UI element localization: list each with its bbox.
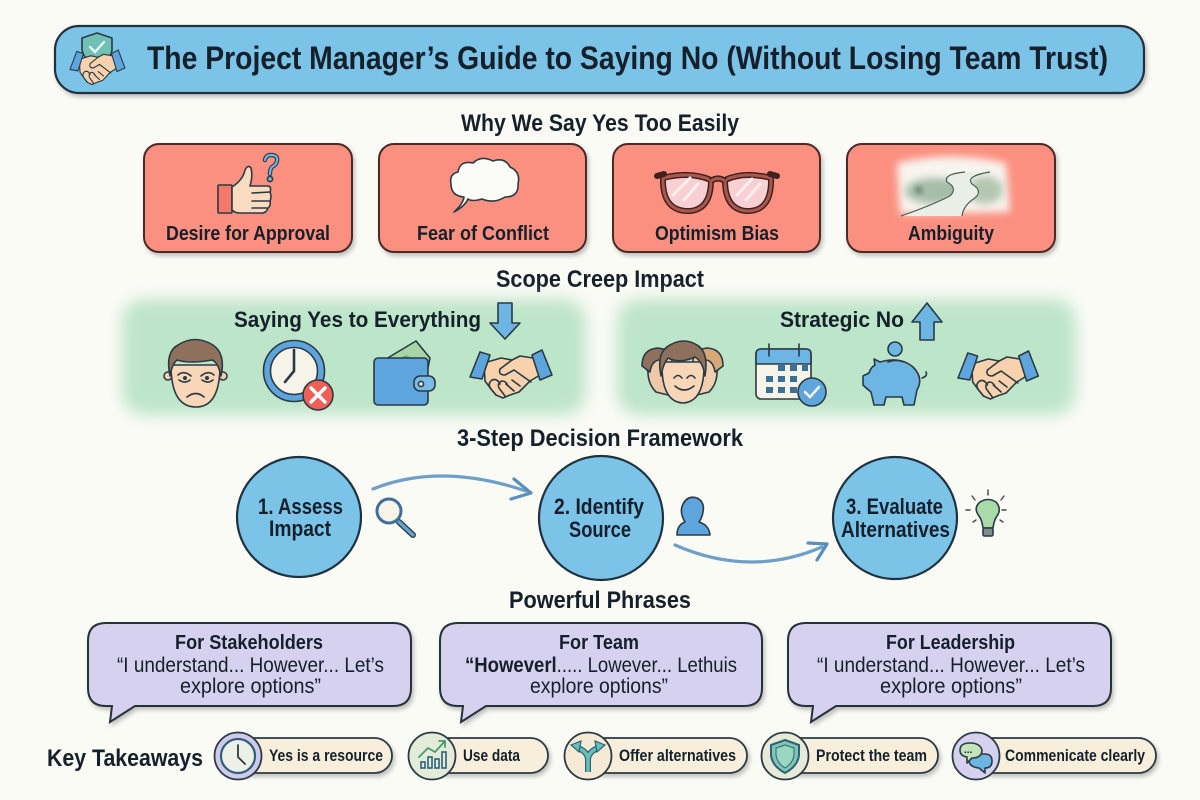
arrow: step 1 to 2 bbox=[373, 476, 531, 499]
icon: thumbs up with question mark bbox=[218, 155, 277, 213]
icon: speech cloud bbox=[451, 158, 519, 212]
label: Desire for Approval bbox=[166, 223, 330, 245]
title text: The Project Manager’s Guide to Saying No (Without Losing Team Trust) bbox=[147, 40, 1108, 76]
takeaway: offer alternatives: Offer alternatives bbox=[619, 746, 736, 765]
bubble: for leadership: For Leadership bbox=[886, 632, 1015, 654]
bubble: for leadership: “I understand... However... Let’s bbox=[817, 654, 1085, 677]
heading: why we say yes: Why We Say Yes Too Easily bbox=[461, 110, 740, 137]
title banner bbox=[55, 26, 1144, 93]
icon: clock with red cross bbox=[264, 340, 333, 410]
step 1 bbox=[237, 457, 361, 577]
card: desire for approval bbox=[144, 144, 352, 252]
arrow: step 2 to 3 bbox=[675, 543, 827, 562]
icon: arrow down bbox=[490, 303, 520, 339]
panel: reasons for saying yes bbox=[144, 144, 1055, 252]
icon: handshake bbox=[958, 351, 1038, 399]
card: fear of conflict bbox=[379, 144, 586, 252]
card: optimism bias bbox=[613, 144, 820, 252]
takeaway: protect the team bbox=[762, 732, 938, 780]
step 2: 2. Identify bbox=[554, 494, 645, 519]
takeaway: offer alternatives bbox=[564, 732, 747, 780]
bubble: for team: explore options” bbox=[530, 675, 668, 698]
bubble: for team: For Team bbox=[559, 632, 639, 654]
step 3 bbox=[833, 457, 957, 579]
icon: person bbox=[677, 497, 710, 535]
panel: phrase speech bubbles bbox=[88, 623, 1111, 722]
takeaway: communicate clearly: ... bbox=[964, 745, 973, 756]
panel: saying yes to everything bbox=[122, 299, 586, 415]
bubble: for stakeholders: “I understand... However... Let’s bbox=[117, 654, 384, 677]
label: Fear of Conflict bbox=[417, 223, 549, 245]
icon: calendar with check bbox=[756, 344, 826, 406]
step 2 bbox=[539, 456, 663, 580]
icon: wallet with cash bbox=[374, 341, 435, 405]
panel heading: Saying Yes to Everything bbox=[234, 307, 481, 332]
panel: strategic no bbox=[617, 299, 1076, 415]
bubble: for team: “Howeverl..... Lowever... Lethuis bbox=[465, 654, 737, 677]
heading: scope creep impact: Scope Creep Impact bbox=[496, 266, 704, 293]
icon: shield and handshake bbox=[70, 33, 125, 85]
heading: powerful phrases: Powerful Phrases bbox=[509, 587, 691, 614]
label: Ambiguity bbox=[908, 223, 995, 245]
icon: foggy road bbox=[897, 156, 1010, 216]
step 1: Impact bbox=[269, 516, 332, 541]
takeaway: communicate clearly bbox=[952, 732, 1156, 780]
step 1: 1. Assess bbox=[258, 494, 343, 519]
takeaway: yes is a resource: Yes is a resource bbox=[269, 746, 383, 765]
bubble: for leadership: explore options” bbox=[880, 675, 1022, 698]
heading: key takeaways: Key Takeaways bbox=[47, 745, 203, 772]
bubble: for stakeholders: For Stakeholders bbox=[175, 632, 323, 654]
heading: framework: 3-Step Decision Framework bbox=[457, 425, 744, 452]
icon: rose-tinted glasses bbox=[657, 174, 777, 211]
takeaway: protect the team: Protect the team bbox=[816, 746, 927, 765]
diagram: 3-step framework bbox=[237, 456, 1006, 580]
icon: lightbulb bbox=[966, 490, 1006, 536]
takeaway: use data: Use data bbox=[463, 746, 520, 765]
icon: tired face bbox=[164, 340, 227, 407]
takeaway: communicate clearly: Commenicate clearly bbox=[1005, 746, 1145, 765]
panel heading: Strategic No bbox=[780, 307, 904, 332]
panel: takeaway pills bbox=[214, 732, 1156, 780]
bubble: for stakeholders bbox=[88, 623, 411, 722]
icon: piggy bank bbox=[863, 342, 926, 405]
bubble: for stakeholders: explore options” bbox=[180, 675, 321, 698]
label: Optimism Bias bbox=[655, 223, 779, 245]
step 3: 3. Evaluate bbox=[846, 494, 943, 519]
card: ambiguity bbox=[847, 144, 1055, 252]
icon: magnifier bbox=[377, 499, 413, 535]
step 2: Source bbox=[569, 517, 631, 542]
icon: happy team bbox=[642, 341, 723, 403]
icon: arrow up bbox=[912, 303, 942, 340]
takeaway: yes is a resource bbox=[214, 732, 392, 780]
bubble: for leadership bbox=[788, 623, 1111, 722]
takeaway: use data bbox=[408, 732, 548, 780]
icon: handshake bbox=[470, 350, 552, 398]
bubble: for team bbox=[440, 623, 762, 722]
step 3: Alternatives bbox=[841, 517, 950, 542]
